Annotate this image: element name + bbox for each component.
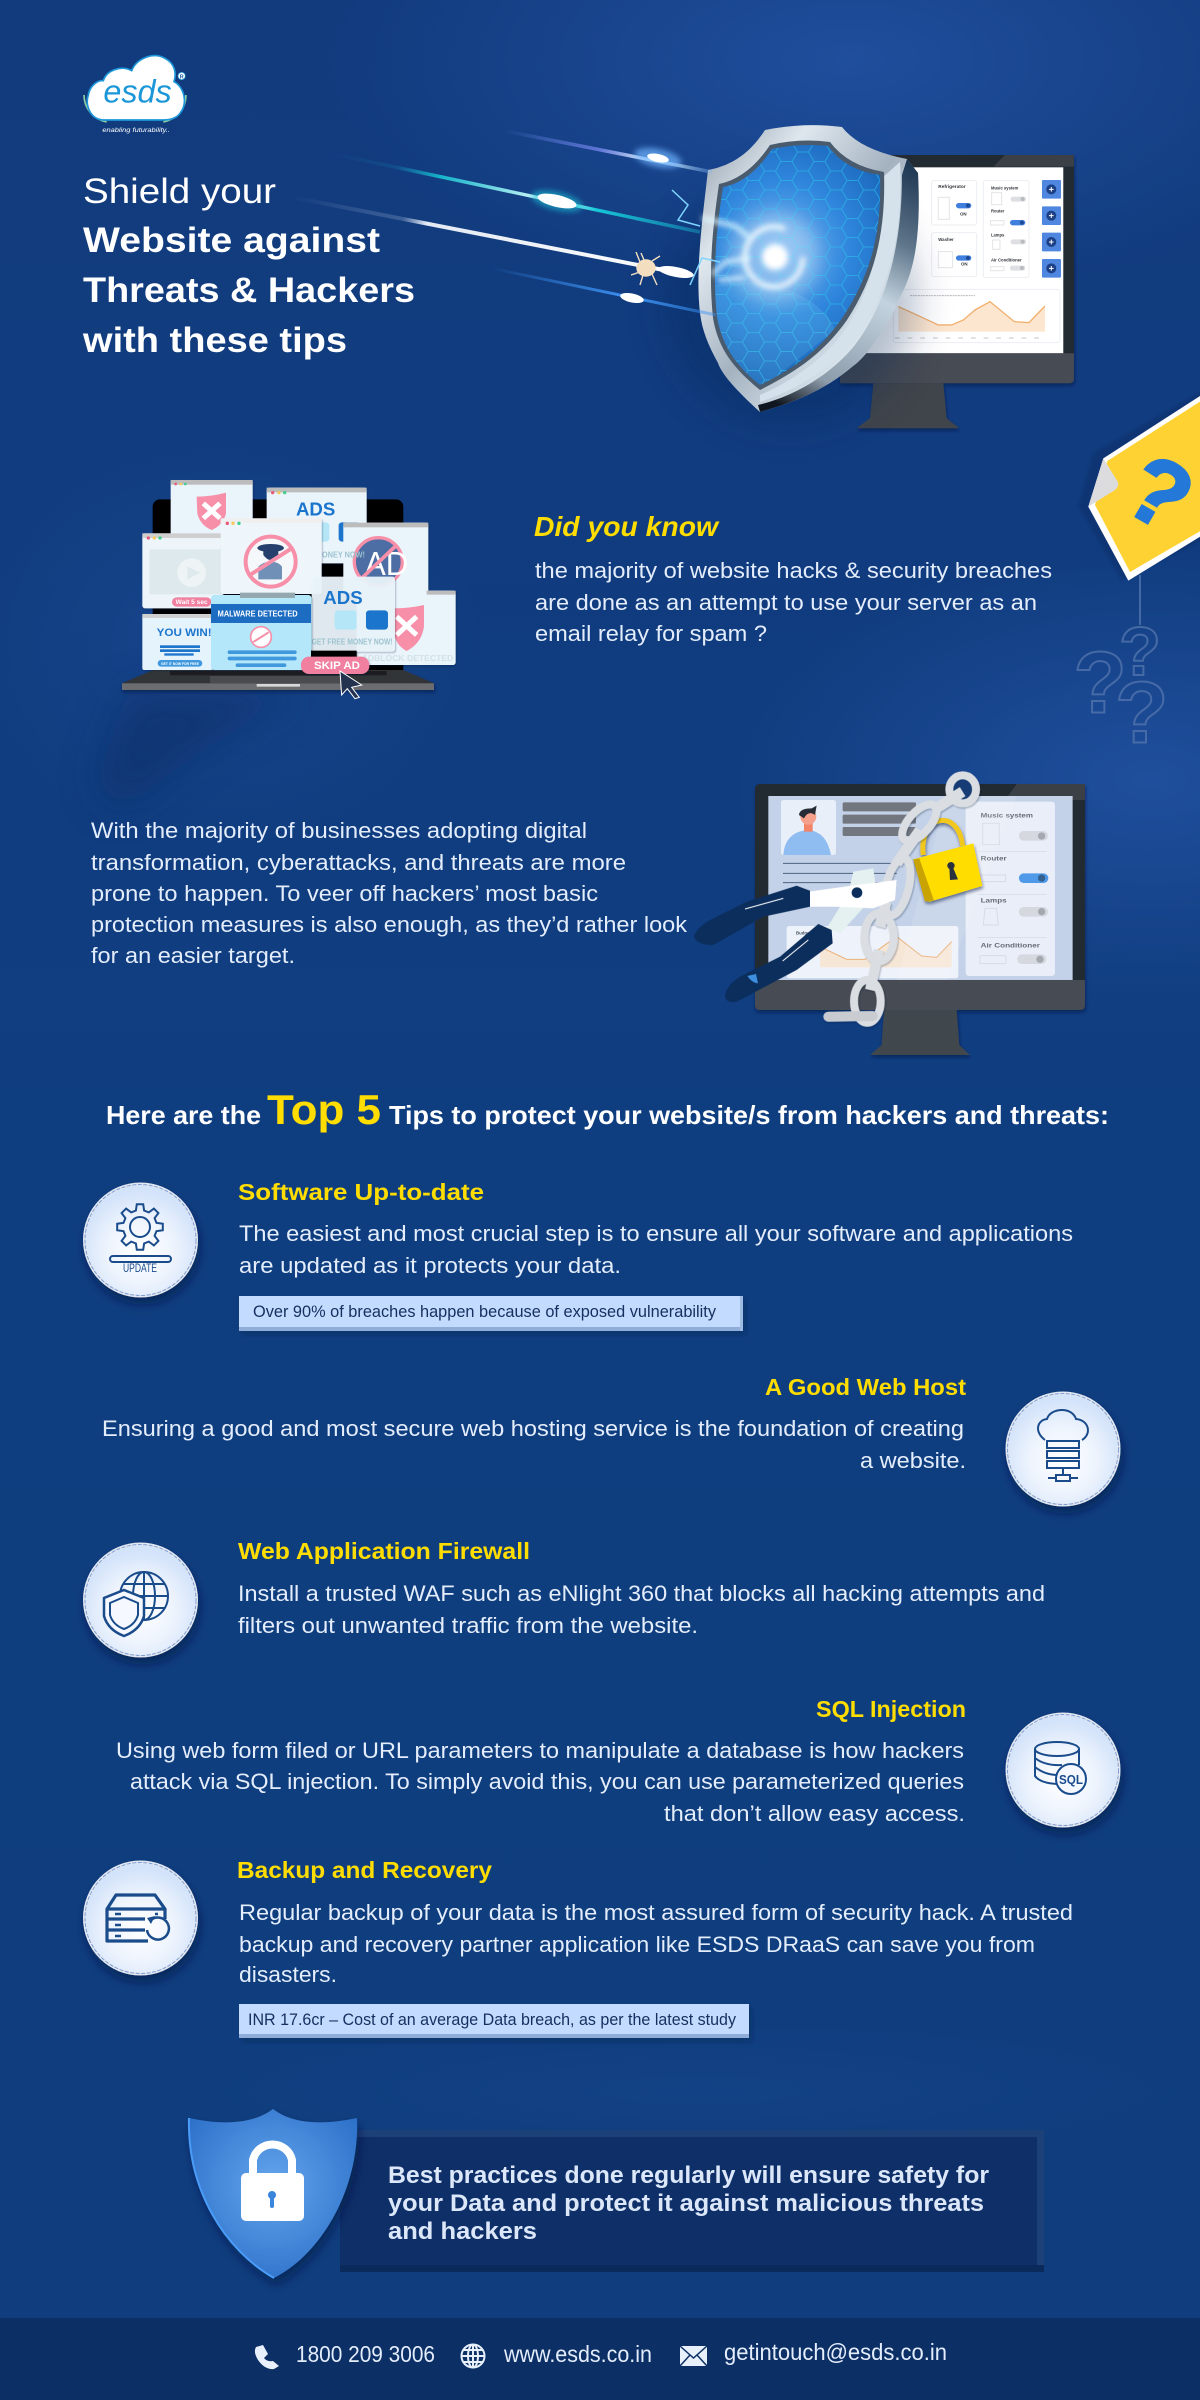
shield inner rim bbox=[711, 141, 884, 390]
monitor screen bbox=[768, 796, 1073, 980]
body: disasters. bbox=[239, 1962, 337, 1987]
device panel: Router bbox=[981, 856, 1007, 863]
tip 1: software up-to-date bbox=[83, 1179, 1073, 1331]
window: shield bbox=[171, 480, 253, 540]
hanging question marks: ? bbox=[1115, 664, 1168, 762]
window: adblock bbox=[357, 591, 456, 665]
body bbox=[239, 1221, 1073, 1278]
shield bbox=[672, 125, 919, 412]
laptop shadow bbox=[95, 690, 310, 810]
shield blue face bbox=[715, 145, 880, 385]
body: Regular backup of your data is the most assured form of security hack. A trusted bbox=[239, 1900, 1073, 1925]
laptop screen bbox=[153, 499, 403, 676]
body: The easiest and most crucial step is to ensure all your software and applications bbox=[239, 1221, 1073, 1246]
monitor with chain, padlock and pliers bbox=[694, 775, 1085, 1055]
tip 4: sql injection bbox=[116, 1696, 1120, 1828]
heading: Software Up-to-date bbox=[238, 1179, 484, 1205]
padlock bbox=[913, 820, 982, 902]
comet 3 bbox=[291, 197, 695, 280]
shield bright bevel bbox=[760, 162, 901, 402]
comet 1 bbox=[505, 131, 712, 172]
logo: esds cloud: enabling futurability.. bbox=[102, 127, 170, 134]
window: ads lower: GET FREE MONEY NOW! bbox=[312, 638, 393, 647]
intro paragraph bbox=[91, 818, 688, 968]
dashboard labels: Music system bbox=[991, 185, 1018, 190]
icon: update gear bbox=[83, 1182, 198, 1298]
body: Install a trusted WAF such as eNlight 360 that blocks all hacking attempts and bbox=[238, 1581, 1045, 1606]
profile card bbox=[781, 800, 836, 855]
padlock icon bbox=[241, 2144, 304, 2221]
body: filters out unwanted traffic from the website. bbox=[238, 1613, 698, 1638]
hanging question marks: ? bbox=[1073, 634, 1127, 732]
icon: mail bbox=[680, 2346, 707, 2366]
dashboard labels: ON bbox=[961, 262, 968, 267]
heading: SQL Injection bbox=[816, 1696, 966, 1722]
pliers bbox=[694, 868, 897, 1002]
title: Website against bbox=[83, 221, 380, 260]
window: video bbox=[142, 533, 223, 608]
logo: esds cloud bbox=[84, 56, 186, 134]
icon: database sql: SQL bbox=[1059, 1772, 1083, 1787]
icon: server backup bbox=[83, 1860, 198, 1976]
comet 4 bbox=[490, 268, 716, 315]
profile lines bbox=[783, 863, 897, 883]
heading: A Good Web Host bbox=[765, 1374, 966, 1400]
money label: IONEY NOW! bbox=[320, 550, 365, 559]
shadow of shield bbox=[665, 175, 915, 425]
intro paragraph: With the majority of businesses adopting digital bbox=[91, 818, 587, 843]
skip ad button bbox=[301, 651, 369, 674]
did you know text: are done as an attempt to use your server as an bbox=[535, 590, 1037, 615]
window: you win: YOU WIN! bbox=[157, 627, 212, 639]
profile text bars bbox=[843, 802, 916, 836]
title: Threats & Hackers bbox=[83, 271, 415, 310]
shield impact glow bbox=[672, 190, 820, 302]
icon: update gear: UPDATE bbox=[123, 1261, 157, 1275]
dashboard cards bbox=[893, 181, 1060, 343]
window: video: Wait 5 sec bbox=[176, 599, 208, 606]
stat callout bbox=[239, 2004, 749, 2038]
dashboard area chart bbox=[895, 296, 1047, 338]
window: you win bbox=[142, 614, 213, 670]
body bbox=[239, 1900, 1073, 1987]
dashboard labels: Refrigerator bbox=[938, 184, 966, 189]
skip ad button: SKIP AD bbox=[314, 660, 360, 672]
window: ads top: ADS bbox=[296, 499, 335, 520]
body: a website. bbox=[860, 1448, 966, 1473]
sticky note with question mark bbox=[1078, 387, 1200, 581]
closing text bbox=[388, 2162, 989, 2245]
closing text: Best practices done regularly will ensure safety for bbox=[388, 2162, 989, 2189]
phone number: 1800 209 3006 bbox=[296, 2341, 435, 2367]
closing panel bbox=[340, 2130, 1044, 2272]
hanging question marks: ? bbox=[1119, 614, 1161, 690]
hanging question marks bbox=[1073, 575, 1168, 762]
device panel bbox=[966, 802, 1055, 976]
window: hacker banned bbox=[221, 518, 322, 594]
icon: database sql bbox=[1006, 1712, 1120, 1828]
laptop base bbox=[122, 670, 434, 690]
footer band bbox=[0, 2318, 1200, 2400]
top 5 heading: Here are the bbox=[106, 1100, 261, 1130]
intro paragraph: prone to happen. To veer off hackers’ most basic bbox=[91, 881, 598, 906]
body bbox=[102, 1416, 966, 1473]
body bbox=[116, 1738, 965, 1826]
dashboard labels: ON bbox=[960, 212, 967, 217]
window: AD blocked bbox=[343, 523, 428, 593]
chart card: Budget bbox=[796, 930, 811, 935]
monitor body bbox=[755, 784, 1085, 1055]
body bbox=[238, 1581, 1045, 1638]
device panel: Lamps bbox=[981, 898, 1007, 905]
stat callout bbox=[239, 1296, 743, 1331]
shield metal frame bbox=[698, 125, 919, 412]
comet 2 bbox=[329, 153, 700, 232]
window: malware detected: MALWARE DETECTED bbox=[218, 610, 298, 619]
tip 3: web application firewall bbox=[83, 1538, 1045, 1658]
icon: globe bbox=[461, 2344, 485, 2368]
window: ads lower: ADS bbox=[323, 587, 363, 608]
window: you win: GET IT NOW FOR FREE bbox=[161, 661, 199, 666]
top 5 heading bbox=[106, 1086, 1109, 1133]
icon: phone bbox=[255, 2345, 279, 2369]
bug bbox=[631, 252, 660, 285]
top 5 heading: Top 5 bbox=[267, 1086, 381, 1133]
chain bbox=[828, 775, 976, 1023]
cursor bbox=[340, 671, 362, 699]
window: adblock: ADBLOCK DETECTED bbox=[362, 654, 454, 663]
logo: esds cloud: esds bbox=[103, 73, 172, 109]
window: malware detected bbox=[211, 593, 312, 670]
website: www.esds.co.in bbox=[503, 2341, 652, 2367]
top 5 heading: Tips to protect your website/s from hackers and threats: bbox=[389, 1100, 1109, 1130]
did you know text: email relay for spam ? bbox=[535, 621, 767, 646]
device panel: Music system bbox=[981, 813, 1033, 820]
intro paragraph: for an easier target. bbox=[91, 943, 295, 968]
laptop with pop-up windows bbox=[122, 480, 456, 699]
body: that don’t allow easy access. bbox=[664, 1801, 965, 1826]
title: with these tips bbox=[82, 321, 347, 360]
body: attack via SQL injection. To simply avoid this, you can use parameterized queries bbox=[130, 1769, 964, 1794]
shield hexagon pattern bbox=[715, 145, 880, 385]
dashboard toggles bbox=[938, 193, 1026, 271]
body: Using web form filed or URL parameters to manipulate a database is how hackers bbox=[116, 1738, 964, 1763]
email: getintouch@esds.co.in bbox=[724, 2339, 947, 2365]
dashboard labels: Washer bbox=[938, 237, 954, 242]
dashboard labels bbox=[938, 184, 1022, 267]
intro paragraph: transformation, cyberattacks, and threats are more bbox=[91, 850, 626, 875]
closing text: your Data and protect it against malicious threats bbox=[388, 2190, 984, 2217]
did you know text bbox=[535, 558, 1052, 646]
chart card bbox=[787, 926, 958, 978]
tip 2: a good web host bbox=[102, 1374, 1120, 1506]
dashboard plus buttons bbox=[1042, 180, 1061, 278]
blue shield with padlock bbox=[189, 2109, 357, 2278]
heading: Backup and Recovery bbox=[237, 1857, 492, 1883]
did you know text: the majority of website hacks & security breaches bbox=[535, 558, 1052, 583]
dashboard labels: Air Conditioner bbox=[991, 258, 1022, 263]
closing text: and hackers bbox=[388, 2218, 537, 2245]
window: ads top bbox=[267, 488, 367, 563]
stat callout: Over 90% of breaches happen because of exposed vulnerability bbox=[253, 1303, 717, 1321]
heading: Web Application Firewall bbox=[238, 1538, 530, 1564]
logo: esds cloud: R bbox=[180, 74, 184, 80]
did you know heading: Did you know bbox=[534, 511, 720, 542]
body: backup and recovery partner application like ESDS DRaaS can save you from bbox=[239, 1932, 1035, 1957]
title: Shield your bbox=[83, 172, 276, 211]
body: Ensuring a good and most secure web hosting service is the foundation of creating bbox=[102, 1416, 964, 1441]
window: ads lower bbox=[312, 577, 395, 652]
stat callout: INR 17.6cr – Cost of an average Data breach, as per the latest study bbox=[248, 2011, 737, 2029]
title bbox=[82, 172, 415, 360]
icon: shield and globe bbox=[83, 1542, 198, 1658]
icon: cloud server bbox=[1006, 1392, 1120, 1506]
window: AD blocked: AD bbox=[365, 546, 408, 583]
tip 5: backup and recovery bbox=[83, 1857, 1073, 2038]
dashboard labels: Router bbox=[991, 208, 1005, 213]
device panel: Air Conditioner bbox=[981, 943, 1040, 950]
shield dark edge bbox=[758, 159, 919, 412]
comets bbox=[291, 131, 716, 315]
monitor with dashboard behind shield bbox=[840, 155, 1074, 428]
body: are updated as it protects your data. bbox=[239, 1253, 621, 1278]
page curl bbox=[1088, 458, 1118, 507]
intro paragraph: protection measures is also enough, as they’d rather look bbox=[91, 912, 688, 937]
screen reflection bbox=[906, 813, 1010, 958]
monitor chin bbox=[840, 353, 1074, 383]
monitor stand bbox=[857, 383, 959, 428]
dashboard labels: Lamps bbox=[991, 233, 1005, 238]
